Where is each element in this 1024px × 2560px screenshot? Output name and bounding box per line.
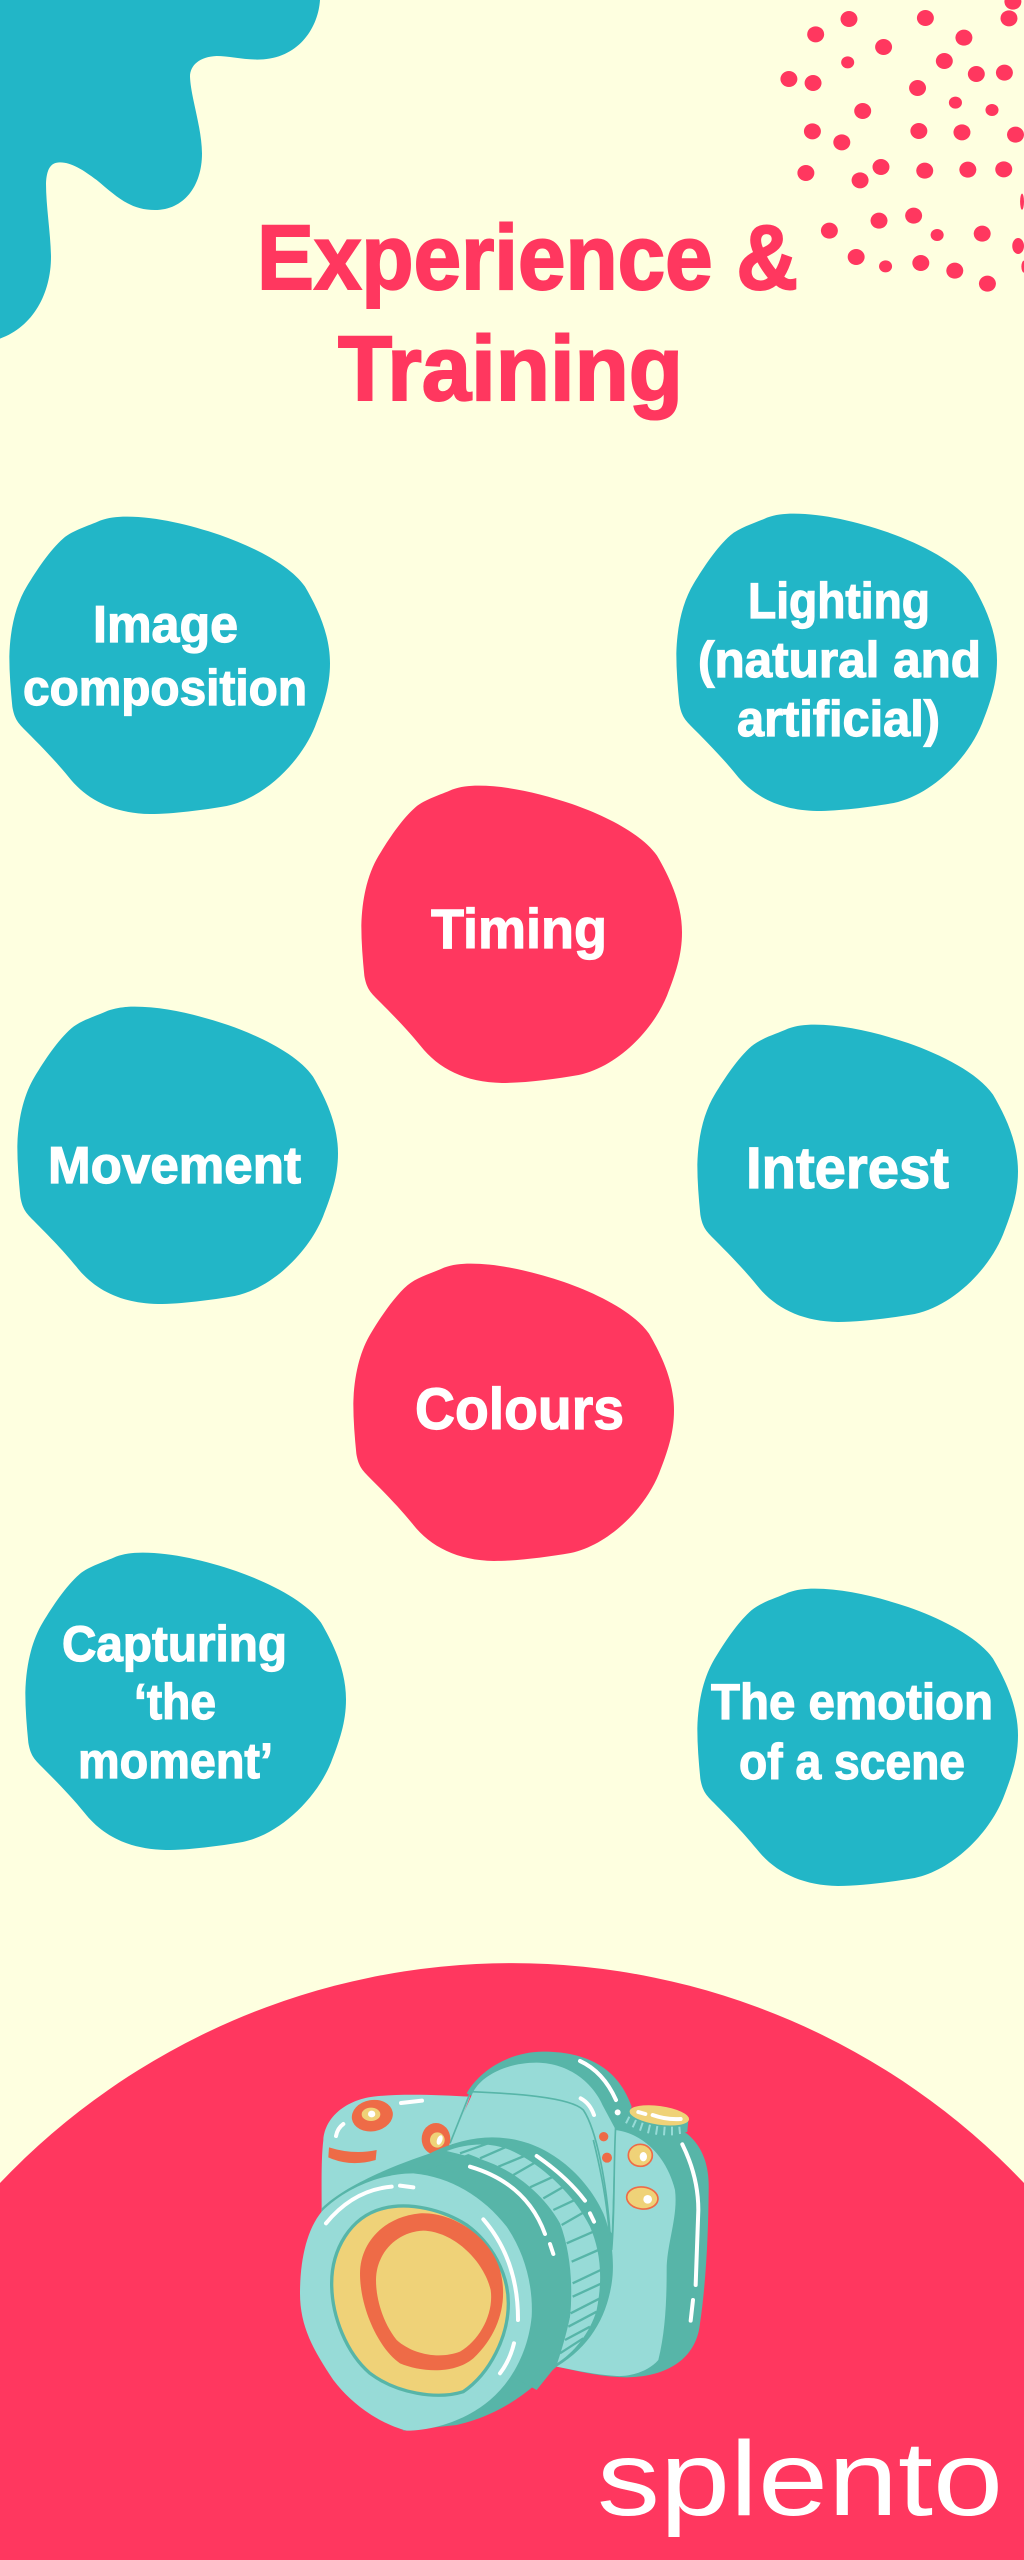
title <box>257 207 798 420</box>
topic: lighting <box>676 514 997 811</box>
decorative teal corner shape <box>0 0 320 339</box>
orange button centre <box>422 2123 450 2155</box>
title: Experience & <box>257 207 798 309</box>
topic: lighting: (natural and <box>698 632 981 688</box>
topic: image composition <box>9 517 330 814</box>
camera prism <box>450 2063 615 2233</box>
icon: camera <box>300 2052 709 2431</box>
topic: capturing the moment: Capturing <box>62 1616 287 1672</box>
lens centre <box>376 2231 491 2355</box>
lens glass <box>332 2206 508 2395</box>
topic: interest: Interest <box>746 1136 949 1201</box>
title: Training <box>338 318 683 420</box>
prism contour lines <box>450 2092 616 2250</box>
red dome footer <box>0 1963 1024 2560</box>
topic: timing: Timing <box>431 897 607 960</box>
camera right body shadow <box>467 2052 709 2377</box>
orange indicator dots <box>599 2132 612 2163</box>
white highlights <box>326 2061 698 2373</box>
lens barrel <box>322 2137 613 2431</box>
orange button left <box>349 2097 395 2135</box>
camera left body <box>322 2095 470 2213</box>
topic: interest <box>697 1025 1018 1322</box>
topic: the emotion of a scene <box>697 1589 1018 1886</box>
topic: movement <box>17 1007 338 1304</box>
lens ribbed ring <box>410 2143 602 2390</box>
topic: colours: Colours <box>415 1377 624 1442</box>
camera grip <box>557 2130 676 2376</box>
lens front <box>300 2173 532 2431</box>
topic: the emotion of a scene: The emotion <box>711 1674 993 1730</box>
yellow side buttons <box>626 2144 659 2211</box>
topic: image composition: Image <box>93 596 238 654</box>
topic: the emotion of a scene: of a scene <box>739 1734 965 1790</box>
topic: lighting: artificial) <box>737 691 940 747</box>
topic: timing <box>361 786 682 1083</box>
topic: capturing the moment: moment’ <box>78 1733 273 1789</box>
lens orange ring <box>360 2213 503 2370</box>
logo: splento: splento <box>597 2420 1003 2538</box>
topic: capturing the moment: ‘the <box>134 1674 216 1730</box>
topic: movement: Movement <box>48 1137 301 1195</box>
top dial <box>623 2102 690 2135</box>
topic: lighting: Lighting <box>748 573 930 629</box>
topic: capturing the moment <box>25 1553 346 1850</box>
orange label mark <box>328 2147 377 2163</box>
decorative dot cluster <box>780 0 1024 292</box>
topic: colours <box>353 1264 674 1561</box>
topic: image composition: composition <box>23 660 307 716</box>
